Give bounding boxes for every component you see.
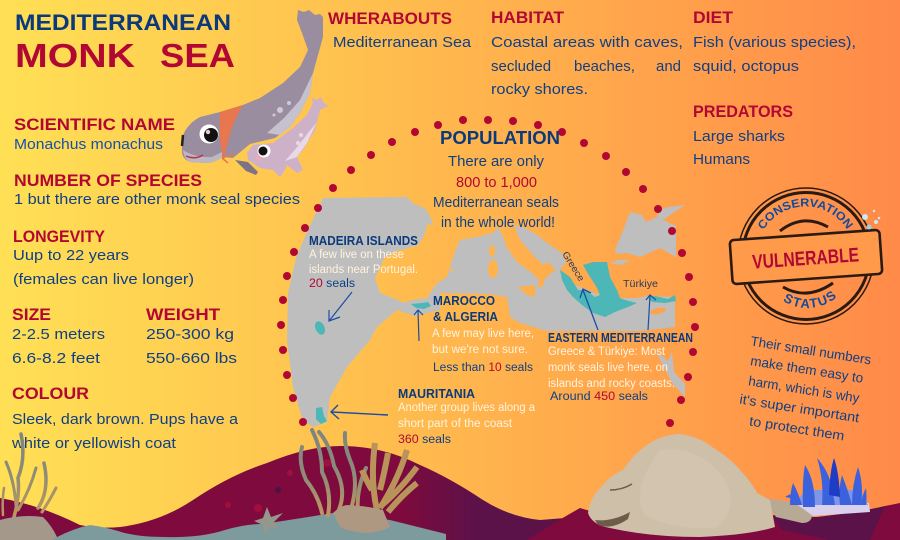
conservation message: to protect them bbox=[748, 414, 846, 443]
panel: size: 6.6-8.2 feet bbox=[12, 350, 101, 367]
label: Eastern Mediterranean bbox=[548, 331, 693, 403]
icon: central rock bbox=[333, 505, 390, 533]
seal range: Morocco and Algeria bbox=[411, 302, 431, 309]
panel: number of species: NUMBER OF SPECIES bbox=[14, 171, 202, 190]
arrow: to Greece bbox=[580, 289, 598, 330]
label: Eastern Mediterranean: islands and rocky coasts. bbox=[548, 378, 675, 390]
label: Eastern Mediterranean: Greece & Türkiye: Most bbox=[548, 346, 666, 358]
pup seal bbox=[247, 97, 328, 177]
illustration: cartoon seals bbox=[182, 10, 328, 177]
panel: number of species bbox=[14, 171, 300, 208]
panel: weight bbox=[146, 305, 237, 367]
label: Marocco and Algeria: & ALGERIA bbox=[433, 310, 498, 324]
panel: weight: WEIGHT bbox=[146, 305, 221, 324]
panel: longevity: Uup to 22 years bbox=[13, 247, 129, 264]
panel: whereabouts bbox=[328, 9, 472, 51]
population block: in the whole world! bbox=[441, 214, 555, 231]
panel: longevity: LONGEVITY bbox=[13, 227, 106, 246]
panel: habitat: and bbox=[656, 58, 681, 75]
label: Mauritania: short part of the coast bbox=[398, 418, 513, 430]
label: Madeira Islands: 20 seals bbox=[309, 278, 355, 290]
panel: habitat: rocky shores. bbox=[491, 81, 588, 98]
label: Madeira Islands: A few live on these bbox=[309, 249, 404, 261]
label: Mauritania: 360 seals bbox=[398, 434, 451, 446]
Black Sea bbox=[615, 205, 685, 257]
conservation message bbox=[738, 334, 873, 443]
label: Marocco and Algeria: Less than 10 seals bbox=[433, 362, 533, 374]
title: MEDITERRANEAN bbox=[15, 10, 231, 35]
panel: size bbox=[12, 305, 105, 367]
panel: scientific name: SCIENTIFIC NAME bbox=[14, 115, 175, 134]
label: Madeira Islands: islands near Portugal. bbox=[309, 264, 418, 276]
title: MONK bbox=[15, 37, 135, 74]
seal range: Turkish coast bbox=[648, 295, 676, 303]
conservation message: make them easy to bbox=[749, 353, 864, 386]
panel: diet bbox=[693, 8, 856, 75]
Atlantic and Mediterranean water bbox=[287, 197, 675, 427]
conservation message: it's super important bbox=[738, 392, 861, 425]
icon: starfish bbox=[254, 507, 283, 536]
title bbox=[15, 10, 235, 74]
conservation message: Their small numbers bbox=[749, 334, 873, 367]
label: Mauritania bbox=[398, 387, 536, 446]
conservation message: harm, which is why bbox=[747, 373, 861, 406]
panel: habitat bbox=[491, 8, 683, 98]
stamp banner bbox=[730, 230, 882, 284]
seabed: sand bbox=[50, 513, 446, 540]
panel: longevity bbox=[13, 227, 194, 288]
dotted circle around the map bbox=[277, 116, 699, 427]
population block: POPULATION bbox=[440, 128, 560, 148]
icon: central kelp bbox=[301, 430, 366, 515]
label: Mauritania: Another group lives along a bbox=[398, 402, 536, 414]
seal range: Madeira bbox=[313, 320, 327, 336]
arrow: to Madeira bbox=[329, 292, 352, 321]
title: SEA bbox=[160, 37, 235, 74]
label: Eastern Mediterranean: Around 450 seals bbox=[550, 391, 648, 403]
panel: whereabouts: Mediterranean Sea bbox=[333, 34, 472, 51]
conservation status stamp: STATUS bbox=[784, 291, 836, 308]
stamp banner: VULNERABLE bbox=[752, 244, 860, 274]
panel: predators bbox=[693, 102, 793, 168]
conservation status stamp bbox=[728, 187, 884, 325]
panel: predators: Humans bbox=[693, 151, 750, 168]
land: Italy and islands bbox=[450, 225, 666, 316]
Sea of Marmara bbox=[610, 260, 630, 265]
panel: size: SIZE bbox=[12, 305, 51, 324]
label: Mauritania: MAURITANIA bbox=[398, 387, 475, 401]
panel: habitat: Coastal areas with caves, bbox=[491, 34, 683, 51]
label: Marocco and Algeria bbox=[432, 294, 534, 374]
label: Eastern Mediterranean: EASTERN MEDITERRANEAN bbox=[548, 331, 693, 345]
panel: habitat: secluded bbox=[491, 58, 551, 75]
arrow: to Mauritania bbox=[331, 405, 388, 419]
arrow: to Türkiye bbox=[646, 295, 656, 330]
map label: Greece: Greece bbox=[559, 250, 586, 284]
population block: There are only bbox=[448, 153, 544, 170]
label: Madeira Islands: MADEIRA ISLANDS bbox=[309, 234, 418, 248]
label: Marocco and Algeria: but we're not sure. bbox=[432, 344, 528, 356]
label: Eastern Mediterranean: monk seals live here, on bbox=[548, 362, 668, 374]
panel: diet: squid, octopus bbox=[693, 58, 799, 75]
seal range: Mauritania bbox=[316, 407, 327, 424]
panel: predators: Large sharks bbox=[693, 128, 785, 145]
label: Madeira Islands bbox=[309, 234, 418, 290]
panel: scientific name bbox=[14, 115, 175, 153]
panel: diet: DIET bbox=[693, 8, 734, 27]
map label: Türkiye: Türkiye bbox=[623, 279, 658, 290]
icon: left rock bbox=[0, 516, 57, 540]
label: Marocco and Algeria: MAROCCO bbox=[433, 294, 495, 308]
panel: diet: Fish (various species), bbox=[693, 34, 856, 51]
seabed: red hills bbox=[0, 446, 900, 540]
panel: habitat: HABITAT bbox=[491, 8, 565, 27]
panel: predators: PREDATORS bbox=[693, 102, 793, 121]
map of the Mediterranean sea bbox=[287, 197, 685, 427]
panel: colour: white or yellowish coat bbox=[11, 435, 177, 452]
panel: colour bbox=[11, 384, 239, 452]
seal range: Greece and Aegean bbox=[560, 262, 637, 317]
mother seal bbox=[182, 10, 323, 175]
Red Sea bbox=[656, 351, 685, 397]
panel: colour: COLOUR bbox=[12, 384, 89, 403]
panel: scientific name: Monachus monachus bbox=[14, 136, 163, 153]
arrow: to Morocco bbox=[414, 310, 423, 341]
panel: whereabouts: WHERABOUTS bbox=[328, 9, 452, 28]
panel: weight: 250-300 kg bbox=[146, 326, 234, 343]
photo: resting monk seal bbox=[588, 434, 812, 537]
stamp arc text: CONSERVATION bbox=[758, 198, 854, 229]
bubbles bbox=[862, 210, 880, 230]
panel: size: 2-2.5 meters bbox=[12, 326, 105, 343]
panel: weight: 550-660 lbs bbox=[146, 350, 237, 367]
panel: habitat: beaches, bbox=[574, 58, 635, 75]
icon: tube sponges bbox=[362, 443, 417, 512]
population block bbox=[433, 128, 560, 231]
population block: Mediterranean seals bbox=[433, 194, 559, 211]
panel: number of species: 1 but there are other monk seal species bbox=[14, 191, 300, 208]
icon: blue anemone bbox=[785, 458, 870, 516]
label: Marocco and Algeria: A few may live here, bbox=[432, 328, 534, 340]
icon: left kelp bbox=[3, 434, 56, 517]
panel: colour: Sleek, dark brown. Pups have a bbox=[12, 411, 239, 428]
population block: 800 to 1,000 bbox=[456, 174, 537, 191]
panel: longevity: (females can live longer) bbox=[13, 271, 194, 288]
